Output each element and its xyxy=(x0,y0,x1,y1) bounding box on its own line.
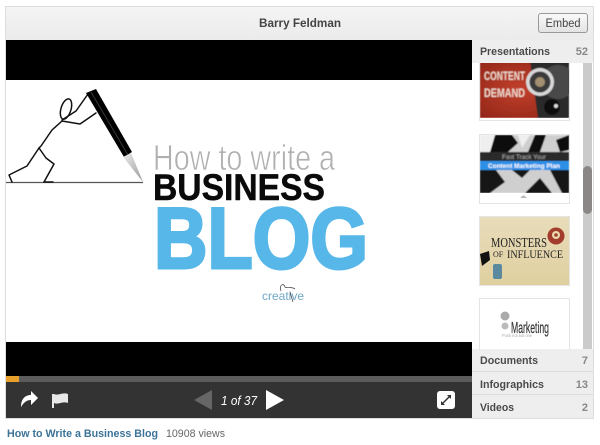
thumbnail: content demand: DEMAND xyxy=(484,86,525,100)
sidebar xyxy=(472,40,593,418)
thumbnail: monsters of influence: OF xyxy=(493,250,504,259)
thumbnail: content marketing plan xyxy=(480,134,570,204)
header title: Barry Feldman xyxy=(259,16,341,30)
how to write a: How to write a xyxy=(153,137,336,178)
tab: documents: 7 xyxy=(582,355,588,367)
icon: stick figure pushing pencil xyxy=(6,89,143,182)
header bar xyxy=(6,7,593,40)
tab: presentations: 52 xyxy=(576,46,588,58)
icon: flag xyxy=(52,393,68,408)
blog: BLOG xyxy=(154,191,368,287)
thumbnail: content demand xyxy=(480,60,575,120)
slide viewer xyxy=(6,40,472,376)
presentation link: How to Write a Business Blog xyxy=(7,428,158,440)
thumbnail: marketing: Push not bot one xyxy=(502,333,532,338)
tab: documents: Documents xyxy=(480,355,538,367)
thumbnail: monsters of influence: INFLUENCE xyxy=(507,247,563,261)
thumbnail: monsters of influence: MONSTERS xyxy=(491,236,547,251)
thumbnail: content marketing plan: Fast Track Your xyxy=(502,154,547,161)
tab: infographics: 13 xyxy=(576,379,588,391)
tab: videos: Videos xyxy=(480,402,514,414)
creative logo: creative xyxy=(262,289,304,303)
tab: videos: 2 xyxy=(582,402,588,414)
icon: previous arrow xyxy=(194,390,212,410)
slide title text xyxy=(153,137,368,303)
thumbnail: content demand: CONTENT xyxy=(484,69,525,83)
embed button: Embed xyxy=(546,18,580,30)
scrollbar xyxy=(583,63,592,349)
thumbnail: monsters of influence xyxy=(480,216,570,286)
tab: videos xyxy=(472,395,593,418)
icon: next arrow xyxy=(266,390,284,410)
thumbnail: content marketing plan: Content Marketing Plan xyxy=(488,163,560,170)
tab: infographics xyxy=(472,372,593,395)
icon: fullscreen xyxy=(437,391,455,409)
view count: 10908 views xyxy=(166,428,225,440)
page counter: 1 of 37 xyxy=(221,394,258,408)
tab: documents xyxy=(472,349,593,372)
control bar xyxy=(6,382,472,418)
tab: infographics: Infographics xyxy=(480,379,544,391)
thumbnail: marketing: Marketing xyxy=(511,320,549,337)
embed button xyxy=(538,14,588,32)
icon: share arrow xyxy=(21,391,38,407)
tab: presentations xyxy=(472,40,593,63)
progress bar xyxy=(6,376,472,382)
tab: presentations: Presentations xyxy=(480,46,550,58)
business: BUSINESS xyxy=(153,167,325,208)
footer caption xyxy=(7,428,225,440)
thumbnail: marketing xyxy=(480,298,570,358)
